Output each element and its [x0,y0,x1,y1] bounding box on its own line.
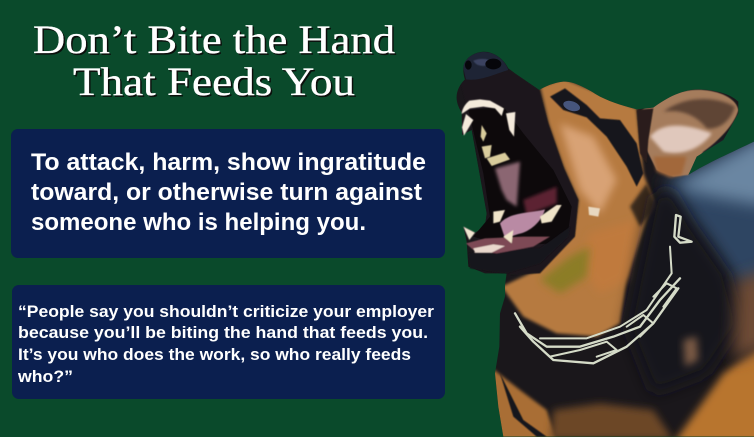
panel: definition: To attack, harm, show ingratitude [31,149,426,176]
title: That Feeds You [73,59,355,104]
dog base fur [440,40,754,437]
panel: example quote: because you’ll be biting the hand that feeds you. [18,324,428,342]
dark muzzle top [460,70,578,275]
black eye band [550,88,643,187]
mouth interior [468,107,572,247]
panel: definition: toward, or otherwise turn against [31,179,422,206]
panel: definition [11,129,445,258]
dark neck side [616,182,736,325]
title: Don’t Bite the Hand [34,18,396,64]
nose [463,52,508,80]
panel: example quote: who?” [17,368,73,386]
panel: example quote: “People say you shouldn’t criticize your employer [18,303,435,321]
title: That Feeds You [74,60,356,106]
panel: example quote: It’s you who does the work, so who really feeds [18,346,411,364]
eye [563,100,580,112]
panel: example quote [12,285,445,399]
ear [640,90,738,177]
title: Don’t Bite the Hand [33,17,395,62]
lower jaw and teeth [463,205,570,273]
blue-grey back [656,142,754,288]
tongue [500,209,545,238]
dog illustration [440,40,754,437]
chain collar [515,215,692,363]
panel: definition: someone who is helping you. [31,209,366,236]
title [33,17,396,106]
tan head and neck [502,78,653,337]
lower chest and shoulder fur [495,368,556,437]
upper teeth [462,99,515,166]
